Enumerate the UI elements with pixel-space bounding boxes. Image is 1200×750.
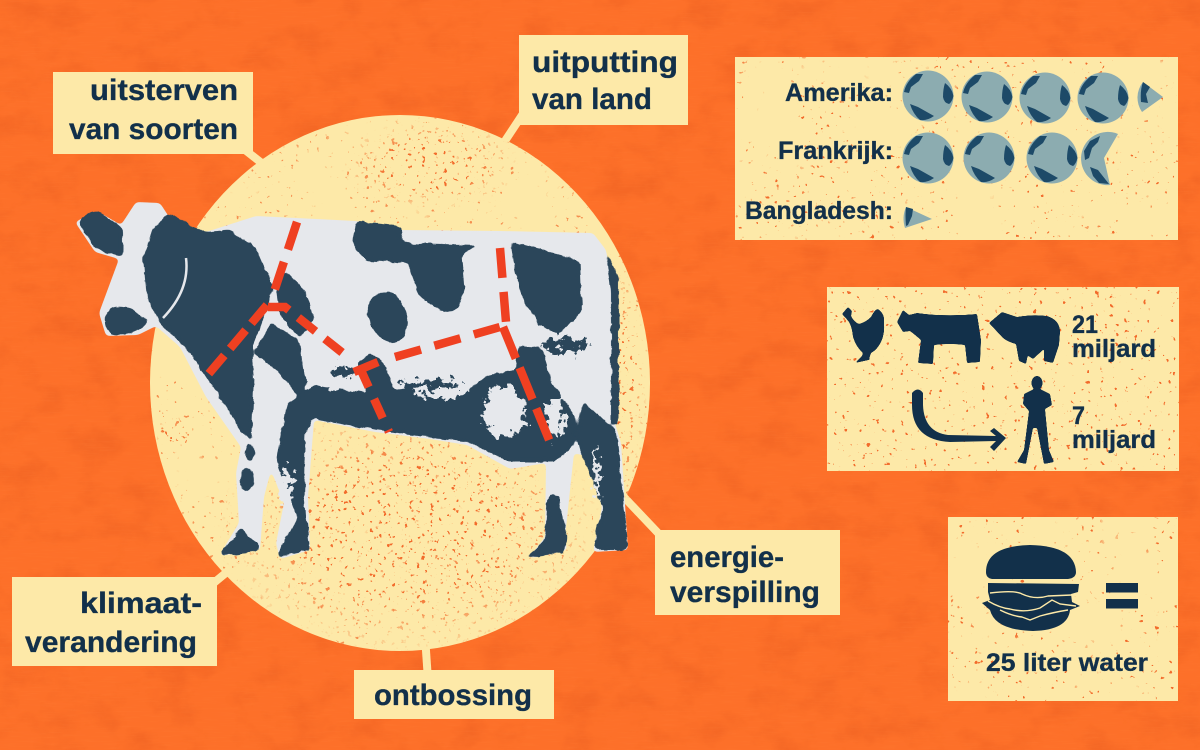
row: Amerika: Amerika: (785, 79, 893, 107)
label: uitputting van land: van land (532, 83, 652, 116)
label: uitsterven van soorten (53, 72, 253, 154)
row: Frankrijk (778, 132, 1118, 185)
label: klimaatverandering: klimaat- (80, 587, 202, 620)
icon: person (1017, 376, 1054, 464)
central circle (150, 115, 650, 655)
text: 21 miljard: 21 (1072, 311, 1098, 339)
belly highlights (280, 368, 600, 505)
icon: chicken (842, 307, 884, 363)
speckled area, right edge (583, 260, 647, 520)
connector lines (210, 100, 676, 680)
label: uitsterven van soorten: uitsterven (90, 74, 238, 107)
label: energieverspilling: energie- (670, 541, 784, 574)
speckled area, lower circle (215, 405, 605, 655)
row: Amerika (785, 70, 1163, 124)
icon: globe slice (1137, 82, 1163, 112)
label: uitputting van land: uitputting (532, 46, 678, 79)
panel: aardes per land (735, 57, 1178, 240)
cow illustration (75, 202, 628, 559)
row: Frankrijk: Frankrijk: (778, 137, 893, 165)
icon: pig silhouette (989, 312, 1060, 364)
label: uitputting van land (519, 35, 688, 125)
icon: hamburger (982, 545, 1080, 631)
label: ontbossing (354, 670, 554, 719)
text: 25 liter water: 25 liter water (986, 649, 1148, 677)
icon: equals sign (1106, 583, 1138, 608)
cow dark patches (78, 211, 628, 559)
label: uitsterven van soorten: van soorten (69, 113, 238, 146)
white collar (163, 258, 187, 318)
label: ontbossing: ontbossing (374, 679, 532, 712)
label: klimaatverandering: verandering (25, 626, 197, 659)
icon: partial globe (1081, 132, 1118, 185)
row: Bangladesh: Bangladesh: (745, 197, 893, 225)
text: 7 miljard: 7 (1072, 402, 1085, 430)
text: 21 miljard: miljard (1072, 335, 1156, 363)
icon: globe sliver (904, 207, 932, 228)
text: 7 miljard: miljard (1072, 426, 1156, 454)
panel: hamburger water (948, 517, 1178, 701)
label: energieverspilling: verspilling (670, 576, 820, 609)
panel: dieren en mensen (827, 287, 1179, 471)
arrow (912, 390, 1006, 451)
mottled flank shading (329, 338, 589, 389)
label: energieverspilling (655, 530, 840, 615)
text: 7 miljard (1072, 402, 1156, 454)
text: 21 miljard (1072, 311, 1156, 363)
label: klimaatverandering (12, 577, 217, 666)
cow body silhouette (75, 202, 628, 559)
speckled area, upper circle (340, 120, 520, 210)
icon: cow silhouette (897, 310, 981, 364)
red cut lines (206, 222, 552, 447)
speckled area, left edge (153, 416, 197, 448)
